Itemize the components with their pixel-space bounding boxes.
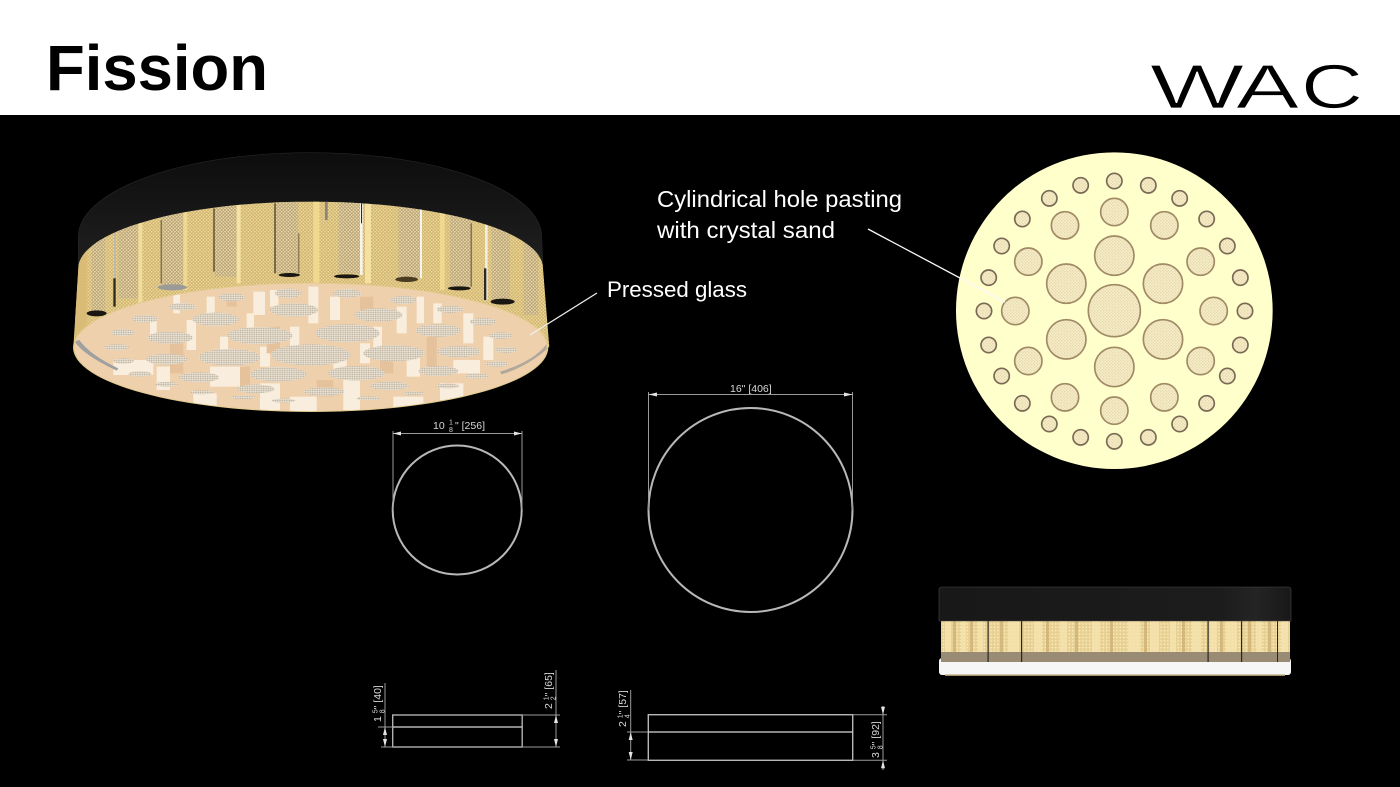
header band — [0, 0, 1400, 115]
dimension drawing: small top view: 1 — [449, 420, 453, 426]
dimension drawing: small top view: " [256] — [455, 420, 485, 432]
dimension drawing: small top view: 8 — [449, 427, 453, 434]
WAC logo: W — [1150, 53, 1245, 122]
dimension drawing: large top view — [648, 383, 852, 612]
dimension drawing: small side view: 1 — [544, 696, 550, 700]
medium holes — [1002, 198, 1227, 424]
dimension drawing: large side view: 8 — [878, 745, 884, 749]
dimension drawing: large side view: 5 — [870, 745, 878, 749]
top view with crystal sand holes — [956, 152, 1273, 469]
dimension drawing: large side view: " [57] — [617, 690, 629, 714]
dimension drawing: small side view: 5 — [372, 709, 380, 713]
dimension drawing: small side view — [372, 670, 560, 747]
glass seams — [988, 620, 1278, 662]
WAC logo: C — [1301, 53, 1363, 122]
dimension drawing: large side view: 3 — [870, 752, 882, 758]
large holes — [1047, 236, 1183, 387]
dimension drawing: large side view: 4 — [624, 714, 632, 718]
fixture side elevation — [939, 587, 1291, 676]
dimension drawing: small side view: " [65] — [543, 672, 555, 696]
callout: pressed glass — [530, 277, 747, 335]
underside diffuser with crystal discs — [70, 280, 553, 417]
WAC logo — [1150, 53, 1363, 122]
disc — [956, 152, 1273, 469]
pressed glass band — [74, 202, 550, 348]
title: Fission — [46, 32, 268, 104]
WAC logo: A — [1236, 53, 1300, 122]
gold fringe — [945, 674, 1285, 676]
dimension drawing: large top view: 16" [406] — [730, 383, 772, 395]
callout: pressed glass: Pressed glass — [607, 277, 747, 302]
black housing — [939, 587, 1291, 621]
dimension drawing: small side view: 1 — [372, 716, 384, 722]
dimension drawing: small side view: " [40] — [372, 685, 384, 709]
callout: cylindrical hole — [656, 186, 1005, 302]
dimension drawing: large side view — [617, 690, 887, 770]
dimension drawing: small side view: 2 — [550, 696, 558, 700]
crystal shadow strip — [941, 652, 1290, 662]
gold glass band — [941, 620, 1290, 656]
callout: cylindrical hole: with crystal sand — [656, 217, 835, 243]
dimension drawing: large side view: 1 — [618, 714, 624, 718]
dimension drawing: small top view: 10 — [433, 420, 445, 432]
white bottom lens — [939, 658, 1291, 675]
small holes — [976, 173, 1253, 449]
dimension drawing: large side view: " [92] — [870, 721, 882, 745]
dimension drawing: small top view — [393, 420, 522, 574]
pendant fixture perspective view — [70, 153, 553, 417]
gold rim — [73, 283, 548, 412]
dimension drawing: small side view: 2 — [543, 703, 555, 709]
inner shadow crescent — [75, 340, 118, 371]
callout: cylindrical hole: Cylindrical hole pasting — [657, 186, 902, 212]
black drum housing — [78, 153, 543, 268]
dimension drawing: small side view: 8 — [380, 709, 386, 713]
dimension drawing: large side view: 2 — [617, 721, 629, 727]
